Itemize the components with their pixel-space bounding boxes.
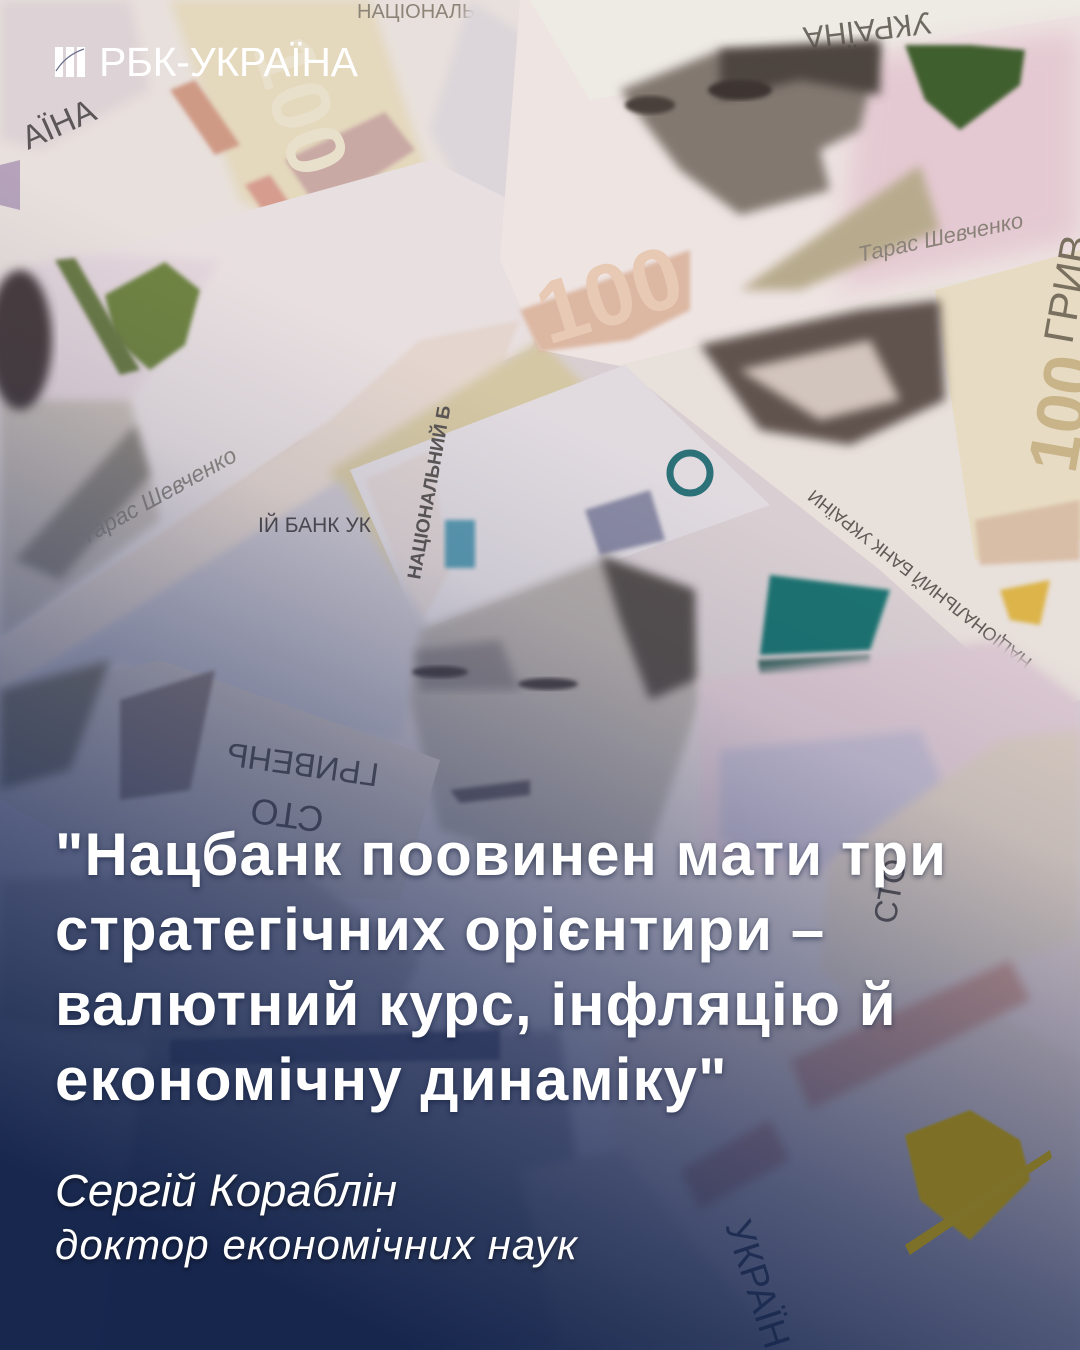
note text: 100: 100 — [235, 25, 368, 187]
note: right side 100 band — [620, 231, 1080, 715]
emblem: top-right palette — [905, 45, 1025, 130]
note text: сто upside down: СТО — [248, 790, 326, 841]
note: left large with leaf emblem — [0, 160, 590, 650]
portrait: centre face — [410, 555, 700, 870]
note text: 100 numeral: 100 — [525, 226, 694, 363]
note: left lower СТО ГРИВЕНЬ — [0, 660, 440, 900]
logo: РБК-Україна: РБК-УКРАЇНА — [99, 39, 358, 85]
author name: Сергій Кораблін — [55, 1165, 397, 1216]
note text: сто (vertical): СТО — [388, 231, 440, 300]
note: top left — [0, 0, 620, 350]
note text: Україна: АЇНА — [16, 91, 101, 156]
note: right centre pink — [700, 640, 1080, 880]
note text: Україна, upside down: УКРАЇНА — [801, 5, 933, 56]
note: central with circle mark — [350, 365, 770, 630]
author title: доктор економічних наук — [55, 1221, 578, 1268]
note text: гривень (vertical): ГРИВЕНЬ — [406, 192, 477, 320]
note text: Національний банк України: НАЦІОНАЛЬНИЙ БАНК УКРАЇНИ — [804, 486, 1035, 673]
note: lower right СТО ГРИВЕНЬ — [820, 730, 1080, 1040]
icon: logo mark — [55, 47, 85, 77]
note text: Шевченко signature, left: Тарас Шевченко — [75, 441, 241, 549]
note text: гривень upside down: ГРИВЕНЬ — [224, 736, 381, 794]
note: lower left — [100, 1030, 600, 1350]
emblem: teal book — [758, 575, 890, 675]
heading: quote — [55, 821, 947, 1117]
heading: quote: валютний курс, інфляцію й — [55, 971, 897, 1038]
note: lower-left edge band — [0, 320, 520, 690]
portrait: top right face — [620, 40, 880, 215]
note: upper-centre shaded — [430, 0, 720, 330]
heading: quote: "Нацбанк поовинен мати три — [55, 821, 947, 888]
note text: Національний банк: НАЦІОНАЛЬНИЙ Б — [403, 404, 455, 581]
note text: Шевченко signature, right: Тарас Шевченко — [856, 208, 1025, 267]
note: centre shaded left — [0, 480, 430, 740]
note text: сто, right: СТО — [866, 856, 913, 926]
note text: Національний: НАЦІОНАЛЬ — [357, 1, 475, 23]
note text: банк україни: ІЙ БАНК УК — [258, 513, 372, 537]
heading: quote: стратегічних орієнтири – — [55, 896, 825, 963]
heading: quote: економічну динаміку" — [55, 1046, 728, 1113]
note: main top-right band with 100 numeral — [500, 0, 1080, 370]
emblem: golden palette — [905, 1110, 1052, 1255]
